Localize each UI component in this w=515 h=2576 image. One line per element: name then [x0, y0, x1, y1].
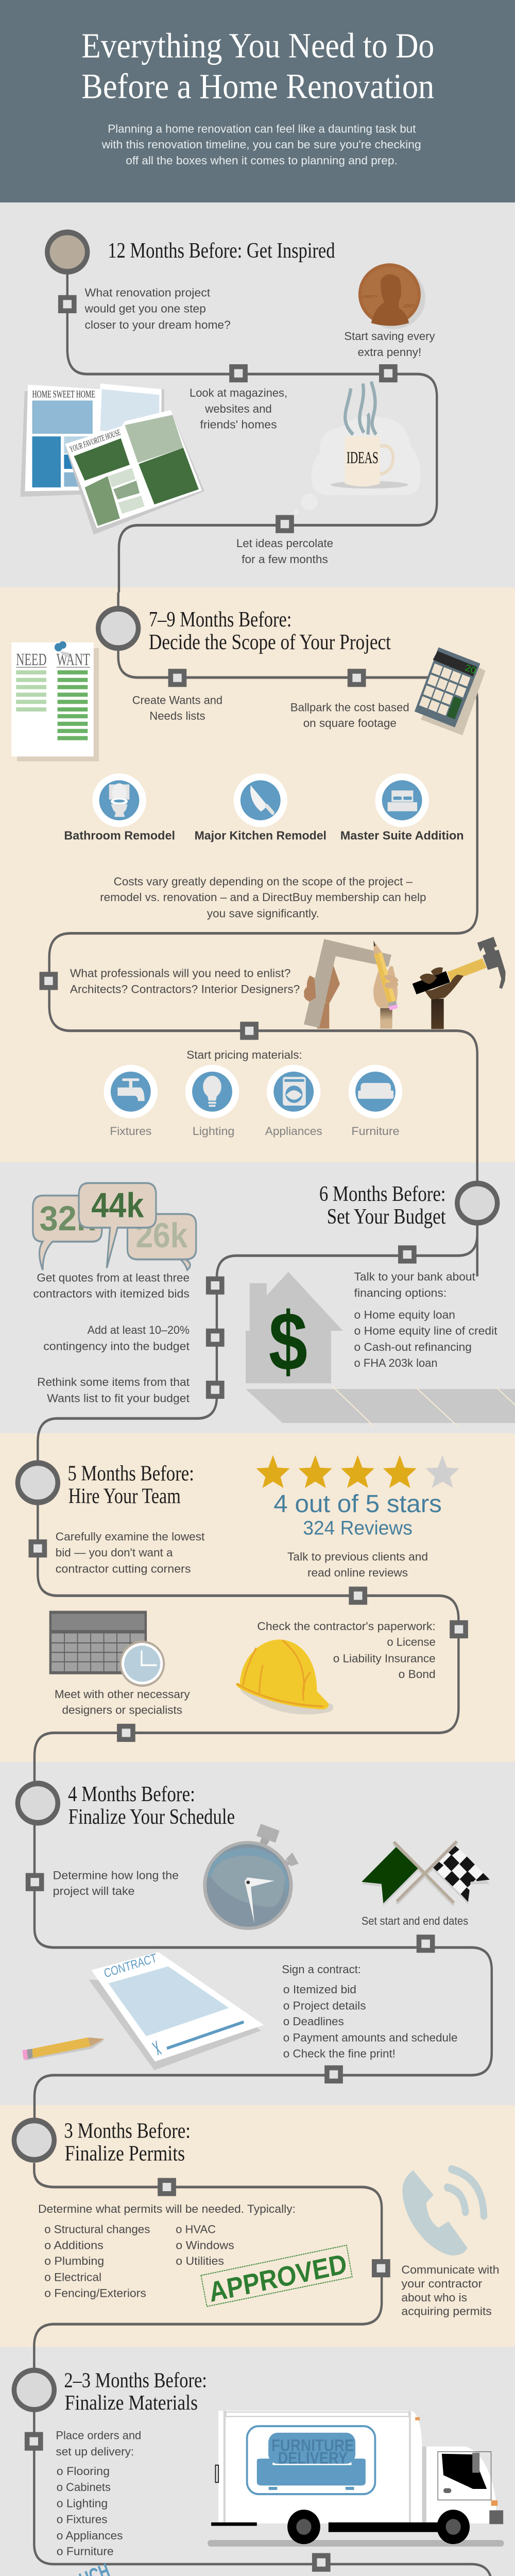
text: start and end dates: Set start and end dates [362, 1915, 468, 1927]
region: header and 12 months [21, 26, 437, 592]
text: wants and needs: Create Wants and [132, 694, 222, 707]
text: financing options: o Cash-out refinancing [354, 1341, 472, 1353]
label: materials: Furniture [351, 1125, 400, 1138]
heading: 5 months: Hire Your Team [68, 1484, 181, 1508]
heading: 6 months: 6 Months Before: [319, 1182, 445, 1206]
text: renovation project question: would get you one step [84, 302, 206, 315]
text: saving [344, 330, 435, 359]
timeline node: 5 months [18, 1463, 58, 1502]
icon: calendar and clock [49, 1611, 164, 1686]
marker [324, 2065, 343, 2083]
title [81, 26, 434, 106]
heading: 4 months: Finalize Your Schedule [68, 1805, 235, 1829]
intro text [101, 123, 421, 167]
text: professionals: What professionals will you need to enlist? [70, 967, 290, 980]
marker [28, 1539, 47, 1557]
text: lowest bid [56, 1531, 205, 1575]
text: wants and needs [132, 694, 222, 722]
marker [40, 972, 58, 990]
text: previous clients [287, 1551, 428, 1579]
text: communicate: about who is [401, 2292, 467, 2304]
illustration: speech bubbles with quotes [33, 1183, 196, 1270]
text: renovation project question: closer to your dream home? [85, 319, 231, 331]
text: budget steps: Add at least 10–20% [88, 1324, 190, 1336]
text: how long [53, 1869, 179, 1897]
panel: 6 months section background [0, 1162, 515, 1433]
text: sign a contract: o Payment amounts and schedule [283, 2031, 457, 2044]
text: ballpark: Ballpark the cost based [290, 701, 409, 714]
timeline path: 12 months [67, 274, 437, 592]
text: magazines [190, 387, 287, 431]
text: budget steps: Rethink some items from that [37, 1376, 190, 1389]
text: previous clients: read online reviews [307, 1567, 408, 1579]
label: project types: Master Suite Addition [340, 829, 464, 842]
illustration: house with dollar sign: $ [269, 1295, 307, 1388]
text: permits list: o Fencing/Exteriors [44, 2287, 146, 2300]
illustration: stopwatch [203, 1824, 299, 1930]
heading: 2-3 months: Finalize Materials [65, 2391, 198, 2414]
panel: 2-3 months section background [0, 2347, 515, 2576]
text: renovation project question [84, 287, 231, 331]
text: magazines: websites and [204, 403, 272, 415]
icon: appliances [267, 1065, 320, 1118]
stamp: approved: APPROVED [207, 2248, 349, 2308]
icon: need want list: WANT [57, 650, 90, 669]
icon: need want list: NEED [16, 650, 47, 669]
timeline node: 3 months [14, 2121, 54, 2160]
intro text: off all the boxes when it comes to planning and prep. [126, 155, 398, 167]
icon: fixtures [104, 1065, 158, 1118]
illustration: ideas coffee mug in thought cloud: IDEAS [347, 448, 379, 467]
text: financing options: o FHA 203k loan [354, 1357, 438, 1369]
icon: need want list [11, 641, 99, 761]
text: financing options: o Home equity line of credit [354, 1325, 497, 1337]
text: permits list: o Electrical [44, 2271, 101, 2284]
text: delivery list: o Flooring [57, 2465, 110, 2478]
text: permits list: o Utilities [176, 2255, 224, 2267]
text: sign a contract: o Deadlines [283, 2015, 344, 2028]
marker [168, 669, 186, 687]
text: delivery list: set up delivery: [56, 2445, 134, 2458]
text: delivery list: Place orders and [56, 2429, 141, 2442]
marker [372, 2259, 390, 2277]
marker [206, 1381, 225, 1399]
marker [450, 1620, 468, 1638]
marker [158, 2178, 176, 2196]
text: financing options: o Home equity loan [354, 1309, 455, 1321]
text: financing options: Talk to your bank about [354, 1270, 475, 1283]
text: professionals: Architects? Contractors? Interior Designers? [70, 983, 300, 996]
illustration: house with dollar sign [234, 1272, 515, 1427]
rating text: 324 Reviews [303, 1517, 413, 1539]
marker [379, 364, 398, 382]
text: financing options [354, 1270, 497, 1369]
text: paperwork: o Liability Insurance [333, 1652, 436, 1665]
text: communicate [401, 2264, 499, 2318]
marker [206, 1276, 225, 1295]
illustration: hard hat [236, 1639, 333, 1715]
text: permits list: o HVAC [176, 2223, 216, 2236]
panel: 7-9 months section background [0, 587, 515, 1162]
heading: 3 months: 3 Months Before: [64, 2119, 191, 2143]
text: delivery list: o Fixtures [57, 2513, 108, 2526]
icon: penny: 2007 [403, 304, 415, 309]
timeline node: 12 months [47, 232, 88, 272]
marker [240, 1022, 259, 1040]
text: costs vary: you save significantly. [207, 908, 319, 920]
text: permits list: o Plumbing [44, 2255, 104, 2267]
text: costs vary: Costs vary greatly depending on the scope of the project – [114, 875, 413, 888]
marker [206, 1329, 225, 1347]
text: sign a contract: o Project details [283, 1999, 366, 2012]
text: percolate: Let ideas percolate [236, 537, 333, 550]
marker [417, 1935, 435, 1953]
label: materials: Fixtures [110, 1125, 151, 1138]
text: sign a contract [282, 1963, 457, 2060]
heading: 7-9 months [149, 608, 391, 654]
illustration: contract and pencil [22, 1951, 264, 2070]
icon: penny [358, 263, 425, 329]
label: materials [110, 1125, 400, 1138]
text: communicate: your contractor [401, 2278, 482, 2290]
intro text: with this renovation timeline, you can be sure you're checking [101, 139, 421, 151]
timeline path: 6 and 5 months [35, 1225, 477, 1777]
heading: 3 months [64, 2119, 191, 2165]
icon: calculator [415, 647, 486, 735]
rating text: 4 out of 5 stars [273, 1489, 442, 1518]
heading: 7-9 months: Decide the Scope of Your Project [149, 631, 391, 654]
title: Before a Home Renovation [81, 66, 434, 106]
text: magazines: friends' homes [200, 418, 277, 431]
rating text [273, 1489, 442, 1539]
heading: 5 months: 5 Months Before: [67, 1462, 194, 1485]
heading: 12 months: 12 Months Before: Get Inspired [108, 239, 335, 263]
illustration: furniture delivery truck: DELIVERY [278, 2449, 348, 2467]
text: budget steps: Wants list to fit your budget [47, 1392, 190, 1405]
text: lowest bid: Carefully examine the lowest [56, 1531, 205, 1543]
illustration: speech bubbles with quotes: 32k [40, 1199, 96, 1238]
illustration: ideas coffee mug in thought cloud [294, 382, 421, 515]
text: percolate [236, 537, 333, 566]
timeline node: 7-9 months [98, 609, 139, 648]
text: saving: extra penny! [358, 346, 421, 359]
text: paperwork: o License [387, 1636, 436, 1649]
region: 7-9 months [11, 592, 486, 1276]
text: lowest bid: contractor cutting corners [56, 1563, 191, 1575]
timeline node: 6 months [457, 1183, 497, 1223]
marker [25, 2432, 43, 2451]
region: 2-3 months and 1 month [8, 2363, 504, 2576]
illustration: furniture delivery truck [208, 2411, 504, 2547]
label: materials: Appliances [265, 1125, 322, 1138]
intro text: Planning a home renovation can feel like a daunting task but [108, 123, 416, 135]
timeline node: 4 months [18, 1784, 58, 1823]
marker [276, 515, 294, 533]
text: designers: designers or specialists [62, 1704, 182, 1717]
text: designers [55, 1688, 190, 1717]
title: Everything You Need to Do [81, 26, 434, 65]
text: delivery list [56, 2429, 141, 2558]
heading: 3 months: Finalize Permits [65, 2142, 185, 2165]
text: renovation project question: What renovation project [85, 287, 210, 299]
text: how long: Determine how long the [53, 1869, 179, 1882]
label: project types: Bathroom Remodel [64, 829, 175, 842]
timeline path: 7-9 months [49, 592, 477, 1276]
marker [348, 669, 366, 687]
illustration: contract and pencil: CONTRACT [102, 1951, 158, 1980]
illustration: furniture delivery truck: FURNITURE [271, 2436, 354, 2455]
text: lowest bid: bid — you don't want a [56, 1547, 173, 1559]
panel: 4 months section background [0, 1762, 515, 2105]
icon: penny: LIBERTY [362, 295, 377, 299]
text: sign a contract: o Itemized bid [283, 1984, 356, 1996]
text: costs vary: remodel vs. renovation – and a DirectBuy membership can help [100, 891, 426, 904]
heading: 4 months: 4 Months Before: [68, 1783, 195, 1806]
text: communicate: Communicate with [401, 2264, 499, 2276]
text: designers: Meet with other necessary [55, 1688, 190, 1701]
text: costs vary [100, 875, 426, 920]
icon: lighting [185, 1065, 239, 1118]
heading: 6 months: Set Your Budget [327, 1205, 446, 1228]
text: paperwork [257, 1620, 436, 1681]
heading: 7-9 months: 7–9 Months Before: [149, 608, 291, 632]
text: permits list: o Structural changes [44, 2223, 150, 2236]
heading: 4 months [68, 1783, 235, 1829]
label: materials: Lighting [193, 1125, 234, 1138]
text: permits list: o Windows [176, 2239, 234, 2252]
label: project types [64, 829, 464, 842]
marker [312, 2553, 331, 2572]
timeline path: 4 and 3 months [34, 1777, 492, 2370]
rating stars [256, 1455, 459, 1488]
text: ballpark [290, 701, 409, 730]
text: delivery list: o Lighting [57, 2497, 108, 2510]
text: start pricing: Start pricing materials: [186, 1049, 302, 1061]
text: budget steps: contingency into the budget [43, 1340, 190, 1353]
region: 6 months and 5 months [18, 1182, 515, 1777]
heading: 2-3 months: 2–3 Months Before: [64, 2368, 207, 2392]
text: sign a contract: Sign a contract: [282, 1963, 361, 1976]
marker [349, 1587, 367, 1605]
text: budget steps: Get quotes from at least three [37, 1272, 190, 1284]
region: 4 months and 3 months [14, 1777, 499, 2370]
panel: 12 months section background [0, 202, 515, 587]
text: sign a contract: o Check the fine print! [283, 2047, 396, 2060]
illustration: magazines [21, 383, 204, 535]
text: budget steps [33, 1272, 190, 1405]
text: delivery list: o Furniture [57, 2545, 114, 2558]
illustration: magazines: YOUR FAVORITE HOUSE [69, 428, 122, 454]
illustration: hands with tools [304, 937, 506, 1029]
text: budget steps: contractors with itemized bids [33, 1287, 190, 1300]
illustration: magazines: HOME SWEET HOME [32, 388, 95, 400]
marker [58, 295, 77, 313]
marker [398, 1245, 417, 1264]
text: how long: project will take [53, 1885, 134, 1897]
illustration: speech bubbles with quotes: 26k [135, 1216, 188, 1255]
icon: phone [402, 2170, 484, 2256]
text: paperwork: Check the contractor's paperwork: [257, 1620, 436, 1633]
icon: bathroom remodel [92, 773, 146, 827]
marker [117, 1724, 135, 1742]
text: magazines: Look at magazines, [190, 387, 287, 399]
marker [26, 1873, 44, 1891]
panel: 3 months section background [0, 2105, 515, 2347]
heading: 6 months [319, 1182, 446, 1228]
text: wants and needs: Needs lists [149, 710, 205, 722]
illustration: start and finish flags [362, 1841, 491, 1906]
icon: kitchen knife [233, 773, 287, 827]
heading: 2-3 months [64, 2368, 207, 2414]
text: financing options: financing options: [354, 1287, 447, 1299]
text: permits list: o Additions [44, 2239, 104, 2252]
illustration: speech bubbles with quotes: 44k [91, 1187, 144, 1225]
icon: bed [375, 773, 429, 827]
panel: 5 months section background [0, 1433, 515, 1762]
text: delivery list: o Cabinets [57, 2481, 111, 2494]
text: percolate: for a few months [242, 553, 328, 566]
text: saving: Start saving every [344, 330, 435, 343]
text: ballpark: on square footage [303, 717, 397, 730]
icon: furniture [349, 1065, 402, 1118]
panel: header background [0, 0, 515, 202]
text: professionals [70, 967, 300, 996]
text: delivery list: o Appliances [57, 2529, 123, 2542]
text: previous clients: Talk to previous clients and [287, 1551, 428, 1563]
text: paperwork: o Bond [399, 1668, 436, 1681]
text: permits list: Determine what permits will be needed. Typically: [38, 2203, 296, 2215]
icon: calculator: 20 [464, 663, 477, 676]
marker [229, 364, 248, 382]
text: communicate: acquiring permits [401, 2305, 492, 2318]
timeline node: 2-3 months [14, 2370, 54, 2410]
timeline path: 2-3 months and 1 month [34, 2363, 492, 2576]
label: project types: Major Kitchen Remodel [195, 829, 327, 842]
text: permits list [38, 2203, 296, 2300]
heading: 5 months [67, 1462, 194, 1508]
